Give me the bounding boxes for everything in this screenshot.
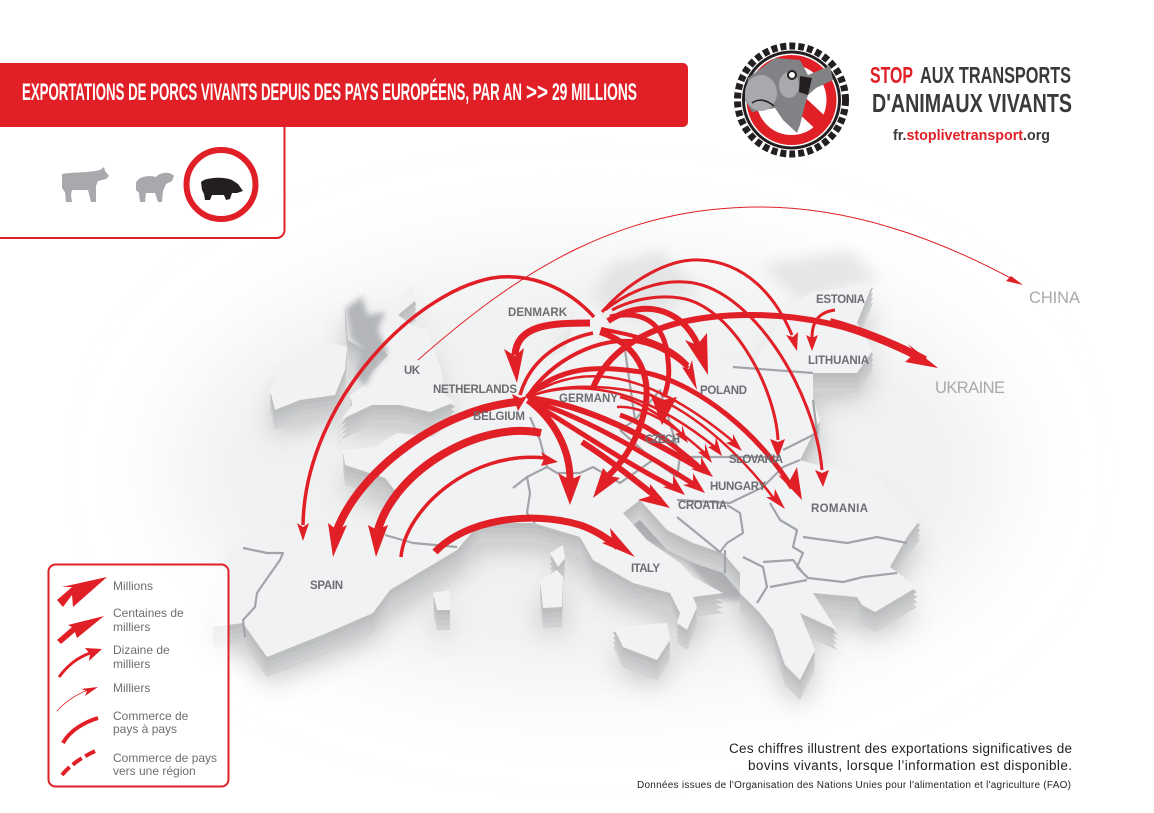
organisation name: STOP	[870, 62, 913, 88]
panel: legend	[48, 564, 228, 786]
arrow: Denmark to Spain	[297, 277, 594, 541]
footnote: Données issues de l'Organisation des Nations Unies pour l'alimentation et l'agriculture (FAO)	[637, 780, 1071, 791]
legend: hundreds of thousands: milliers	[113, 620, 150, 634]
arrow: Germany to Czech	[620, 397, 688, 443]
country labels: SPAIN	[310, 580, 343, 592]
footnote	[637, 741, 1072, 791]
organisation name	[870, 62, 1072, 118]
Scottish and Irish sea shading	[346, 297, 388, 385]
arrow: Belgium to Slovakia	[527, 376, 742, 451]
background haze	[170, 250, 1010, 690]
country labels: CZECH	[645, 434, 680, 446]
legend: country to region trade: vers une région	[113, 764, 196, 778]
country labels: UKRAINE	[935, 379, 1005, 397]
arrow: Denmark to Czech	[610, 315, 677, 425]
arrow: Spain to Switzerland	[401, 452, 558, 557]
organisation name: D'ANIMAUX VIVANTS	[872, 88, 1072, 118]
arrow: Germany to Ukraine	[593, 315, 938, 388]
legend: millions: Millions	[113, 579, 153, 593]
arrow: Germany to Hungary	[620, 415, 705, 472]
country labels: LITHUANIA	[808, 355, 869, 367]
arrow: Denmark to Croatia	[593, 332, 647, 498]
arrow: Denmark to Slovakia	[612, 297, 785, 458]
legend: country to region trade: Commerce de pays	[113, 751, 217, 765]
arrow: Germany to Croatia	[582, 442, 670, 508]
footnote: Ces chiffres illustrent des exportations significatives de	[729, 741, 1072, 756]
country borders	[243, 350, 907, 637]
country labels: GERMANY	[559, 393, 618, 405]
legend: millions	[57, 577, 153, 607]
country labels: POLAND	[700, 385, 747, 397]
arrow: Denmark to Lithuania	[602, 260, 798, 351]
website: fr.stoplivetransport.org	[893, 128, 1050, 144]
panel: animal selector	[0, 127, 284, 238]
Adriatic shade	[622, 503, 745, 600]
arrow: Estonia to Lithuania	[806, 310, 835, 351]
country labels: CHINA	[1029, 289, 1080, 307]
arrow: Denmark to Belgium	[512, 333, 593, 411]
arrow: UK to China	[418, 207, 1023, 360]
legend: country to region trade	[62, 750, 217, 778]
arrow: Belgium to Croatia north	[528, 400, 705, 493]
arrow: Spain to Italy	[435, 518, 635, 557]
legend: thousands	[57, 681, 150, 711]
arrow: Belgium to Serbia	[527, 387, 785, 509]
Scandinavia fade	[590, 250, 880, 320]
legend: tens of thousands	[59, 643, 170, 677]
arrow: Denmark to Netherlands	[504, 323, 590, 383]
country labels: DENMARK	[508, 307, 568, 319]
footnote: bovins vivants, lorsque l’information est disponible.	[748, 758, 1072, 773]
header banner	[0, 63, 688, 127]
map of Europe	[213, 250, 920, 706]
country labels: CROATIA	[678, 500, 727, 512]
country labels	[310, 289, 1080, 592]
arrow: Belgium to Romania	[527, 369, 802, 500]
arrow: Belgium to Croatia	[528, 400, 685, 495]
icon: pig selected	[186, 150, 256, 219]
logo	[738, 46, 846, 154]
arrow: Belgium to Slovakia west	[527, 388, 722, 456]
country labels: NETHERLANDS	[433, 384, 517, 396]
country labels: ROMANIA	[811, 503, 868, 515]
legend: country to country trade: Commerce de	[113, 709, 189, 723]
legend: thousands: Milliers	[113, 681, 150, 695]
flow arrows	[297, 207, 1023, 557]
country labels: UK	[404, 365, 421, 377]
legend: hundreds of thousands: Centaines de	[113, 606, 184, 620]
legend: hundreds of thousands	[57, 606, 184, 644]
country labels: SLOVAKIA	[729, 454, 783, 466]
heading chevrons: >>	[526, 79, 548, 106]
arrow: Belgium to Italy north	[528, 400, 581, 505]
legend: country to country trade: pays à pays	[113, 722, 177, 736]
arrow: Denmark to Poland second	[601, 329, 688, 365]
arrow: Belgium to Hungary	[528, 398, 713, 477]
country labels: HUNGARY	[710, 481, 766, 493]
arrow: Denmark to Romania	[605, 282, 829, 487]
country labels: ESTONIA	[816, 294, 865, 306]
icon: cow	[62, 167, 109, 202]
heading total: 29 MILLIONS	[552, 79, 637, 106]
organisation name: AUX TRANSPORTS	[920, 62, 1071, 88]
arrow: Denmark to Poland	[608, 309, 708, 375]
arrow: Germany to Slovakia	[617, 407, 712, 463]
arrow: Netherlands to Spain	[328, 402, 516, 557]
arrow: Belgium to Spain	[368, 431, 541, 557]
legend: tens of thousands: Dizaine de	[113, 643, 170, 657]
legend: tens of thousands: milliers	[113, 657, 150, 671]
icon: sheep	[136, 173, 174, 202]
country labels: BELGIUM	[473, 411, 525, 423]
arrow: Belgium to Poland	[527, 341, 697, 398]
heading: EXPORTATIONS DE PORCS VIVANTS DEPUIS DES PAYS EUROPÉENS, PAR AN	[22, 78, 522, 106]
country labels: ITALY	[631, 563, 660, 575]
legend: country to country trade	[63, 709, 189, 743]
